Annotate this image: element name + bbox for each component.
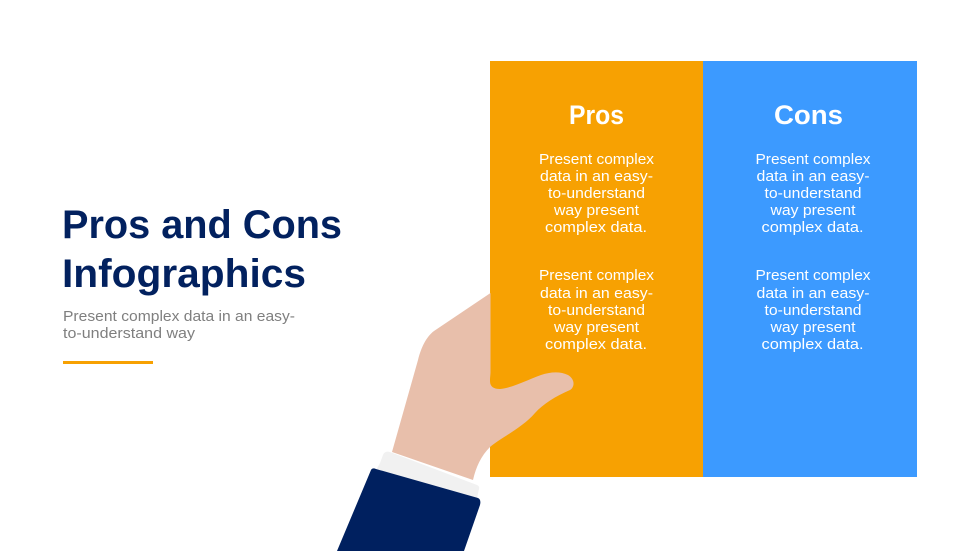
cons text block 1 <box>756 151 871 236</box>
cons background <box>703 61 917 477</box>
cons text block 2: Present complex <box>756 267 871 284</box>
pros text block 1 <box>539 151 655 236</box>
cons text block 1: way present <box>769 202 856 219</box>
cons text block 1: data in an easy- <box>756 168 870 185</box>
pros text block 1: complex data. <box>545 219 647 236</box>
title <box>62 203 342 296</box>
hand <box>392 293 574 480</box>
cons text block 2: complex data. <box>762 336 864 353</box>
icon: hand holding the board <box>337 293 574 551</box>
pros text block 1: data in an easy- <box>540 168 653 185</box>
cons text block 2: data in an easy- <box>756 285 870 302</box>
subtitle text: Present complex data in an easy- <box>63 308 295 325</box>
cons text block 2: to-understand <box>764 302 862 319</box>
cons text block 1: Present complex <box>756 151 871 168</box>
title: Infographics <box>62 252 306 296</box>
pros text block 2: Present complex <box>539 267 655 284</box>
pros heading: Pros <box>569 100 624 130</box>
pros text block 2: to-understand <box>548 302 645 319</box>
pros text block 2: complex data. <box>545 336 647 353</box>
shirt cuff <box>375 452 479 498</box>
cons text block 1: complex data. <box>762 219 864 236</box>
panel: pros <box>490 61 703 477</box>
cons heading: Cons <box>774 100 843 130</box>
pros text block 1: to-understand <box>548 185 645 202</box>
pros text block 1: Present complex <box>539 151 655 168</box>
pros text block 2: way present <box>553 319 640 336</box>
title: Pros and Cons <box>62 203 342 247</box>
pros background <box>490 61 703 477</box>
subtitle text: to-understand way <box>63 325 196 342</box>
pros text block 1: way present <box>553 202 640 219</box>
cons text block 2: way present <box>769 319 856 336</box>
pros text block 2: data in an easy- <box>540 285 653 302</box>
cons text block 1: to-understand <box>764 185 862 202</box>
panel: cons <box>703 61 917 477</box>
cons text block 2 <box>756 267 871 353</box>
subtitle text <box>63 308 295 342</box>
jacket sleeve <box>337 468 480 551</box>
pros text block 2 <box>539 267 655 353</box>
accent underline <box>63 361 153 364</box>
